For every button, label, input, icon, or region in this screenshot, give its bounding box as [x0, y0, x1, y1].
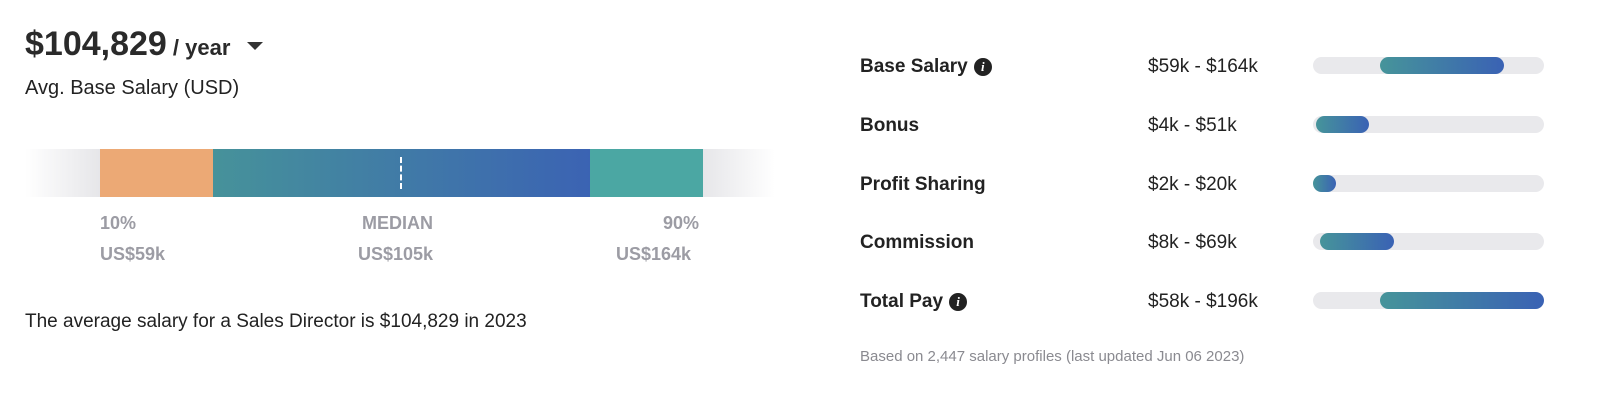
text: 90% [663, 213, 699, 233]
heading: average salary: $104,829 / year [25, 25, 230, 63]
row: total pay [860, 291, 1544, 312]
text: MEDIAN [362, 213, 433, 233]
row: profit sharing: $2k - $20k [1148, 174, 1237, 195]
row: total pay: i [956, 294, 960, 309]
text: US$59k [100, 244, 165, 264]
row: base salary: $59k - $164k [1148, 56, 1258, 77]
row: bonus: $4k - $51k [1148, 115, 1237, 136]
row: base salary [860, 56, 1544, 77]
icon: dropdown caret [247, 42, 263, 50]
row: total pay: $58k - $196k [1148, 291, 1258, 312]
row: bonus [860, 115, 1544, 136]
row: base salary: Base Salary [860, 56, 968, 77]
summary text: The average salary for a Sales Director is $104,829 in 2023 [25, 311, 527, 332]
text: US$105k [358, 244, 433, 264]
row: total pay: Total Pay [860, 291, 943, 312]
text: US$164k [616, 244, 691, 264]
percentile labels: 10% [100, 213, 136, 233]
row: bonus: Bonus [860, 115, 919, 136]
subtitle: Avg. Base Salary (USD) [25, 77, 239, 99]
row: commission: $8k - $69k [1148, 232, 1237, 253]
row: profit sharing: Profit Sharing [860, 174, 986, 195]
row: base salary: i [981, 59, 985, 74]
row: profit sharing [860, 174, 1544, 195]
row: commission [860, 232, 1544, 253]
median marker [400, 157, 402, 189]
percentile bar chart [49, 149, 752, 197]
row: commission: Commission [860, 232, 974, 253]
footnote: Based on 2,447 salary profiles (last updated Jun 06 2023) [860, 348, 1244, 365]
